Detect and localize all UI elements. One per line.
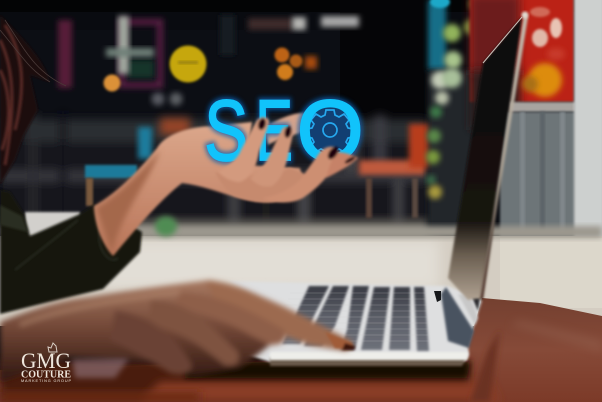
- little finger: [110, 310, 192, 374]
- logo: GMG Couture Marketing Group: COUTURE: [21, 370, 71, 380]
- upper hand: forearm, palm and thumb: [94, 113, 312, 256]
- typing hand: [0, 280, 352, 382]
- SEO text: S: [204, 83, 248, 179]
- icon: gear: [307, 110, 353, 156]
- background: bokeh signs and lights: [58, 0, 481, 235]
- finger one: [218, 117, 269, 182]
- SEO hologram: [204, 83, 364, 179]
- forearm and back of hand: [0, 280, 300, 382]
- nails: [257, 117, 356, 165]
- sleeve: [0, 190, 142, 314]
- gear disc: [305, 104, 355, 154]
- middle finger: [175, 292, 285, 345]
- background: pale ground: [0, 212, 602, 326]
- SEO glow: E: [256, 83, 293, 179]
- key rows: [276, 293, 429, 341]
- screen edge: [480, 14, 528, 300]
- SEO glow: S: [204, 83, 248, 179]
- background: grey wall and pillar: [500, 0, 602, 240]
- SEO glow: [204, 83, 364, 179]
- logo crown icon: [48, 343, 57, 352]
- logo: GMG Couture Marketing Group: GMG: [21, 348, 71, 373]
- keyboard: [282, 286, 429, 351]
- logo: GMG Couture Marketing Group: [21, 343, 71, 383]
- finger three: [262, 147, 339, 202]
- upper hand: fingers: [215, 117, 358, 202]
- hinge: [441, 287, 474, 348]
- wooden table: [0, 298, 602, 402]
- finger two: [250, 127, 293, 187]
- SEO text: [204, 83, 364, 179]
- laptop base: [228, 281, 482, 362]
- laptop shadow: [185, 362, 470, 378]
- index finger: [205, 281, 352, 351]
- ring finger: [150, 300, 239, 365]
- SEO text: E: [256, 83, 293, 179]
- little finger: [326, 152, 358, 178]
- hair: [0, 15, 66, 185]
- background: red poster: [470, 0, 574, 130]
- SEO text: O: [297, 83, 364, 179]
- SEO glow: O: [297, 83, 364, 179]
- palm lower webbing: [215, 168, 315, 202]
- fingertip: [325, 332, 355, 350]
- laptop: [185, 12, 528, 378]
- screen: [448, 17, 522, 300]
- thumb: [263, 113, 312, 145]
- background: blurred railing: [0, 112, 430, 238]
- arm highlight: [20, 292, 180, 325]
- logo: GMG Couture Marketing Group: MARKETING GROUP: [21, 379, 71, 383]
